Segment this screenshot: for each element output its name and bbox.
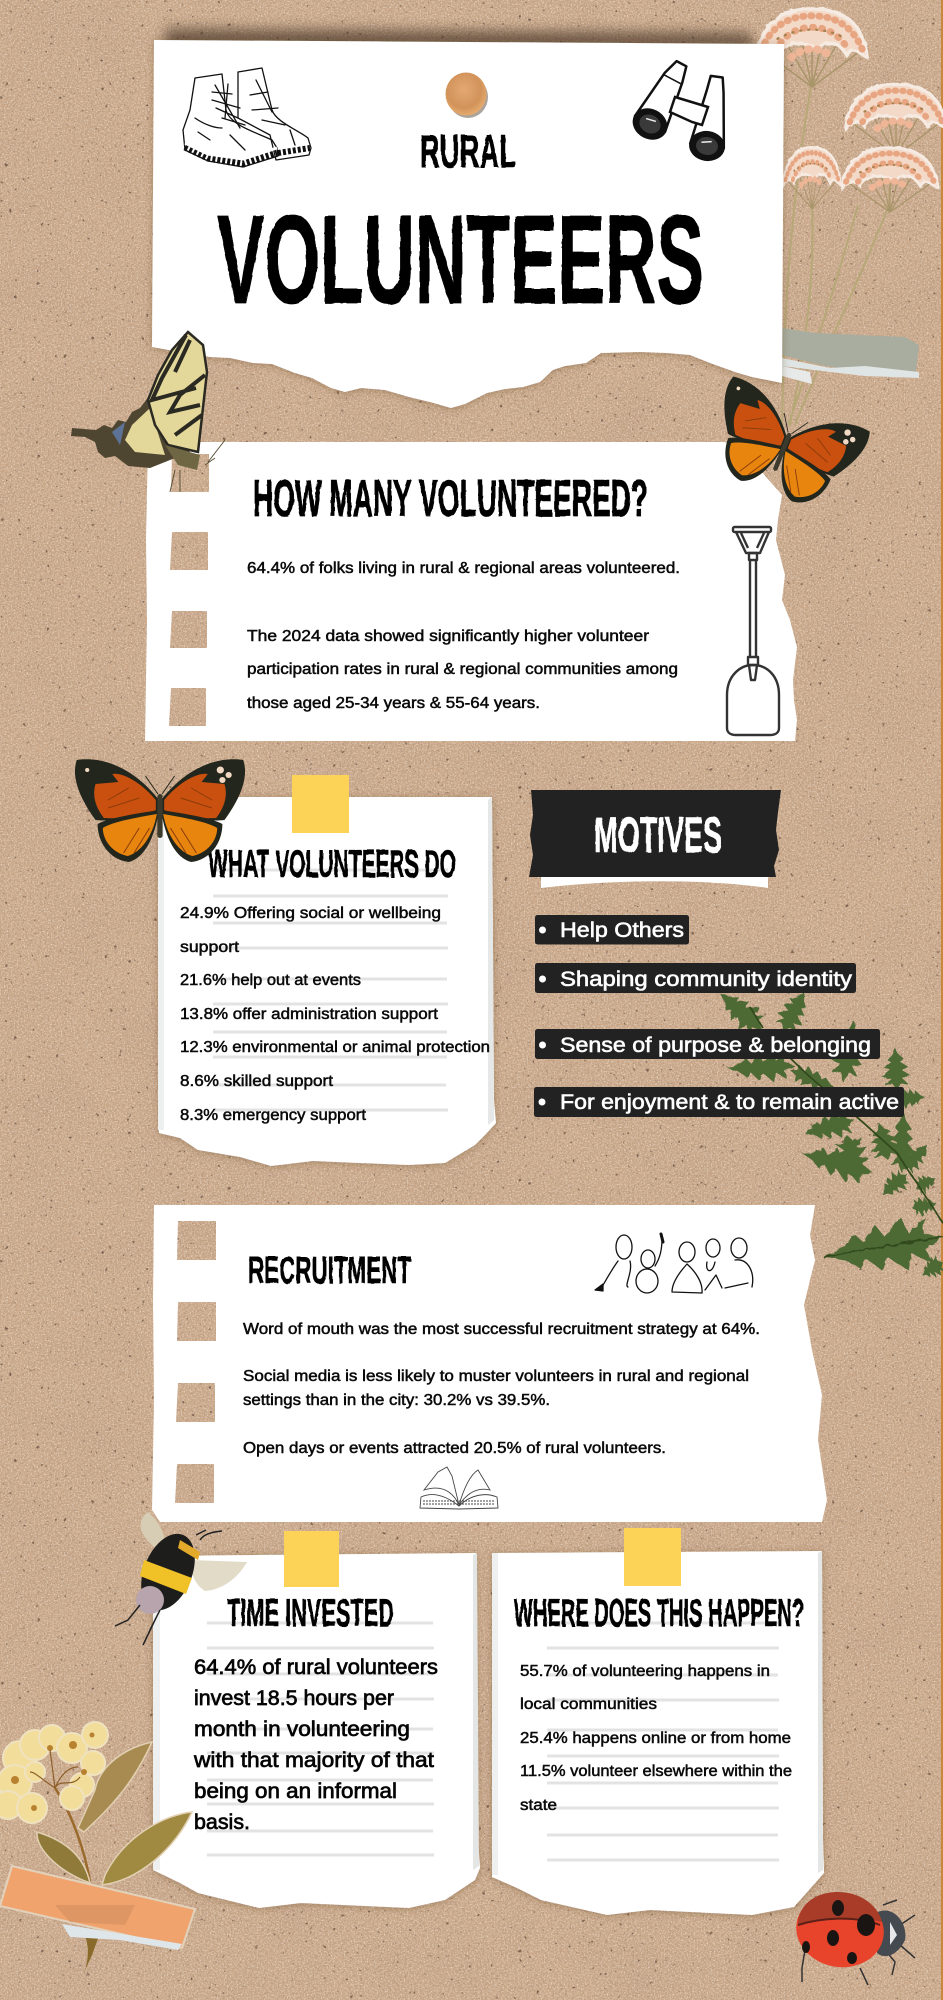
icon: open book bbox=[420, 1467, 498, 1509]
text block: 25.4% happens online or from home bbox=[520, 1730, 791, 1747]
heading: MOTIVES: MOTIVES bbox=[594, 807, 722, 863]
icon: people bbox=[595, 1234, 753, 1293]
dried flowers top right bbox=[757, 9, 943, 425]
icon: shovel bbox=[727, 527, 779, 735]
subtitle: RURAL: RURAL bbox=[420, 125, 516, 177]
text block: Social media is less likely to muster volunteers in rural and regional bbox=[243, 1368, 749, 1385]
list bbox=[180, 905, 490, 1124]
text block: 55.7% of volunteering happens in bbox=[520, 1663, 770, 1680]
icon: pin bbox=[446, 72, 488, 118]
motive: community identity: Shaping community identity bbox=[560, 968, 853, 991]
motive: purpose and belonging: Sense of purpose & belonging bbox=[560, 1034, 871, 1057]
panel: what volunteers do bbox=[158, 775, 496, 1166]
tape: yellow bbox=[624, 1528, 681, 1586]
flower with orange tape bbox=[0, 1722, 195, 1977]
text block: with that majority of that bbox=[193, 1749, 434, 1772]
tape: yellow bbox=[292, 775, 349, 833]
text block: 64.4% of rural volunteers bbox=[194, 1656, 438, 1679]
icon: hiking boots bbox=[183, 68, 311, 167]
text block: participation rates in rural & regional communities among bbox=[247, 661, 678, 678]
list: support bbox=[180, 939, 240, 956]
text block: The 2024 data showed significantly higher volunteer bbox=[247, 628, 649, 645]
tape: yellow bbox=[284, 1531, 339, 1587]
list: 12.3% environmental or animal protection bbox=[180, 1039, 490, 1056]
washi tape grey-green bbox=[782, 328, 919, 384]
text block: local communities bbox=[520, 1696, 657, 1713]
text block: 11.5% volunteer elsewhere within the bbox=[520, 1763, 792, 1780]
text block bbox=[193, 1656, 438, 1834]
panel: recruitment bbox=[152, 1205, 827, 1522]
list: 21.6% help out at events bbox=[180, 972, 361, 989]
panel: header paper bbox=[152, 40, 784, 408]
icon: binoculars bbox=[627, 56, 735, 163]
butterfly: swallowtail bbox=[71, 332, 225, 492]
text block: Word of mouth was the most successful recruitment strategy at 64%. bbox=[243, 1321, 760, 1338]
heading: WHAT VOLUNTEERS DO bbox=[208, 843, 456, 886]
text block: state bbox=[520, 1797, 557, 1814]
panel: time invested bbox=[153, 1531, 480, 1908]
butterfly: orange lower bbox=[75, 759, 245, 862]
header shadow bbox=[165, 28, 755, 52]
list: 8.6% skilled support bbox=[180, 1073, 334, 1090]
list: 13.8% offer administration support bbox=[180, 1006, 439, 1023]
motive: purpose and belonging bbox=[535, 1029, 880, 1059]
text block bbox=[520, 1663, 792, 1814]
heading: RECRUITMENT bbox=[248, 1250, 411, 1292]
text block bbox=[243, 1321, 760, 1457]
ladybug bbox=[790, 1886, 915, 1985]
panel: motives banner bbox=[529, 790, 781, 888]
panel: where does this happen bbox=[492, 1528, 824, 1915]
text block bbox=[247, 560, 680, 712]
motive: help others: Help Others bbox=[560, 919, 684, 942]
motive: help others bbox=[535, 915, 689, 944]
bee bbox=[115, 1512, 247, 1645]
text block: invest 18.5 hours per bbox=[194, 1687, 394, 1710]
text block: month in volunteering bbox=[194, 1718, 410, 1741]
fern behind motives bbox=[710, 982, 943, 1285]
text block: basis. bbox=[194, 1811, 250, 1834]
text block: being on an informal bbox=[194, 1780, 397, 1803]
butterfly: orange upper bbox=[697, 375, 872, 519]
list: 24.9% Offering social or wellbeing bbox=[180, 905, 441, 922]
motive: community identity bbox=[535, 963, 856, 993]
text block: Open days or events attracted 20.5% of rural volunteers. bbox=[243, 1440, 666, 1457]
panel: how many volunteered bbox=[145, 442, 797, 741]
text block: settings than in the city: 30.2% vs 39.5%. bbox=[243, 1392, 550, 1409]
motive: enjoyment bbox=[534, 1087, 904, 1117]
heading: TIME INVESTED bbox=[227, 1592, 394, 1635]
text block: those aged 25-34 years & 55-64 years. bbox=[247, 695, 540, 712]
motive: enjoyment: For enjoyment & to remain active bbox=[560, 1091, 899, 1114]
list: 8.3% emergency support bbox=[180, 1107, 367, 1124]
text block: 64.4% of folks living in rural & regional areas volunteered. bbox=[247, 560, 680, 577]
